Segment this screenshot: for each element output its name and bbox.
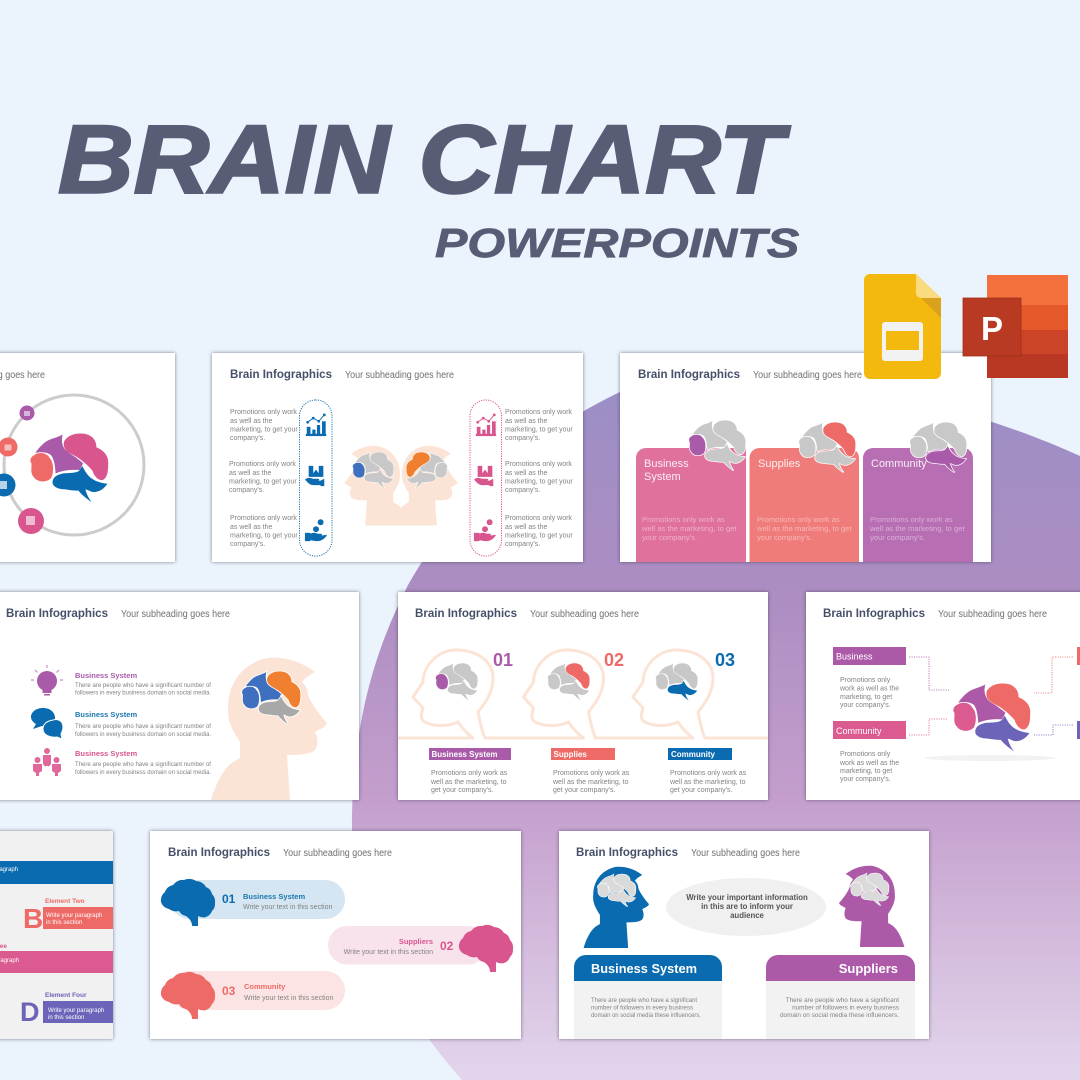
text block business: marketing, to get — [840, 694, 892, 701]
pill 02: 02 — [440, 939, 454, 953]
label: community: Community — [671, 750, 716, 759]
left capsule — [300, 400, 332, 556]
panel: slide head with list — [0, 592, 359, 800]
right text column: Promotions only work — [505, 515, 572, 522]
right labels — [1077, 647, 1080, 739]
text block business: your company's. — [840, 702, 891, 709]
panel: slide pills — [150, 831, 521, 1039]
left text column: Promotions only work — [230, 515, 297, 522]
element four — [20, 992, 113, 1027]
card: business system: well as the marketing, to get — [641, 524, 737, 533]
list item 3: There are people who have a significant number of — [75, 761, 211, 768]
icon: people — [33, 748, 61, 776]
subheading: Your subheading goes here — [345, 370, 454, 381]
number 02: 02 — [604, 650, 624, 670]
card: supplies: Supplies — [758, 458, 801, 470]
text block community — [839, 751, 899, 783]
card: community — [863, 448, 973, 562]
heading: Brain Infographics — [638, 369, 740, 381]
card: supplies: Promotions only work as — [757, 515, 840, 524]
text block business: work as well as the — [839, 686, 899, 692]
heading: Brain Infographics — [230, 369, 332, 381]
icon: light bulb — [31, 665, 63, 696]
panel: slide double heads — [212, 353, 583, 562]
panel: slide facing heads — [559, 831, 929, 1039]
card: community: your company's. — [870, 533, 925, 542]
band: element three — [0, 943, 113, 973]
left text column: marketing, to get your — [230, 532, 298, 540]
purple head brain — [851, 873, 889, 906]
title: BRAIN CHART — [58, 106, 791, 214]
element two — [23, 898, 113, 934]
right text column: company's. — [505, 435, 540, 442]
head outlines — [398, 650, 768, 738]
card: supplies: well as the marketing, to get — [756, 524, 852, 533]
left text column: company's. — [230, 435, 265, 442]
right text column: marketing, to get your — [505, 426, 573, 434]
band: element one — [0, 861, 113, 884]
label: community: Community — [836, 726, 882, 736]
double head silhouette — [344, 446, 458, 526]
right head brain — [406, 452, 447, 489]
text block business: Promotions only — [840, 677, 891, 684]
body text: Promotions only work as — [670, 770, 747, 777]
card: business system: your company's. — [642, 533, 697, 542]
left text column: company's. — [230, 541, 265, 548]
card: business system — [636, 448, 746, 562]
left text column: marketing, to get your — [230, 426, 298, 434]
label: business system — [429, 748, 511, 760]
pill 01: 01 — [222, 892, 236, 906]
panel: slide circular brain — [0, 353, 175, 562]
heading: Brain Infographics — [576, 847, 678, 859]
colored brain — [242, 671, 300, 724]
text block business — [839, 677, 899, 709]
right text column: marketing, to get your — [505, 478, 573, 486]
background blob — [352, 380, 1080, 1080]
text block community: your company's. — [840, 776, 891, 783]
pill 03: Community — [244, 982, 286, 991]
brain shadow — [925, 755, 1055, 761]
pill 02 — [328, 925, 513, 972]
blue head — [584, 867, 649, 948]
left text column: as well as the — [229, 470, 272, 477]
subheading: Your subheading goes here — [530, 609, 639, 620]
element two: Write your paragraph — [46, 913, 102, 919]
card: business system: Promotions only work as — [642, 515, 725, 524]
right text column: as well as the — [505, 470, 548, 477]
panel: business system: Business System — [591, 961, 697, 976]
element four: Element Four — [45, 992, 87, 999]
right text column: Promotions only work — [505, 409, 572, 416]
pill 02: Suppliers — [399, 937, 433, 946]
number 03: 03 — [715, 650, 735, 670]
left head brain — [353, 452, 394, 489]
list item 2: Business System — [75, 710, 137, 719]
subheading: Your subheading goes here — [691, 848, 800, 859]
label: supplies — [551, 748, 615, 760]
left text column: as well as the — [230, 418, 273, 425]
card: supplies — [750, 448, 859, 562]
right text column: as well as the — [505, 418, 548, 425]
label: business: Business — [836, 652, 873, 662]
panel: suppliers — [766, 955, 915, 1039]
text block community: Promotions only — [840, 751, 891, 758]
right text column: as well as the — [505, 524, 548, 531]
purple head — [839, 866, 904, 947]
element four: in this section — [48, 1015, 84, 1021]
left text column: Promotions only work — [230, 409, 297, 416]
pill 01: Business System — [243, 892, 305, 901]
list item 3 — [75, 749, 211, 776]
text block community: marketing, to get — [840, 768, 892, 775]
number 01: 01 — [493, 650, 513, 670]
panel: business system: number of followers in every business — [591, 1004, 693, 1012]
body text: get your company's. — [670, 787, 732, 794]
body text: well as the marketing, to — [669, 779, 746, 786]
subheading: Your subheading goes here — [753, 370, 862, 381]
panel: suppliers: There are people who have a significant — [786, 997, 899, 1004]
left text column: company's. — [229, 487, 264, 494]
callout ellipse: audience — [730, 911, 765, 920]
panel: slide lettered elements — [0, 831, 113, 1039]
left text column: marketing, to get your — [229, 478, 297, 486]
subheading: Your subheading goes here — [121, 609, 230, 620]
right text column: marketing, to get your — [505, 532, 573, 540]
list item 2: There are people who have a significant number of — [75, 723, 211, 730]
card brains — [689, 420, 966, 472]
list item 1: Business System — [75, 671, 137, 680]
panel: slide connected brain — [806, 592, 1080, 800]
panel: business system: There are people who have a significant — [591, 997, 697, 1004]
right text column: company's. — [505, 541, 540, 548]
panel: slide three numbered heads — [398, 592, 768, 800]
body text: well as the marketing, to — [552, 779, 629, 786]
subtitle: POWERPOINTS — [435, 221, 799, 266]
callout ellipse — [666, 878, 826, 936]
element two: B — [23, 903, 43, 934]
brain — [953, 684, 1030, 751]
right capsule — [470, 400, 502, 556]
ring — [4, 395, 144, 535]
head silhouette — [211, 658, 327, 800]
label: community — [833, 721, 906, 739]
element four: Write your paragraph — [48, 1008, 104, 1014]
body text: Promotions only work as — [431, 770, 508, 777]
label: community — [668, 748, 732, 760]
card: community: Promotions only work as — [870, 515, 953, 524]
body text — [430, 770, 747, 794]
icon: google slides — [864, 274, 941, 379]
element two: in this section — [46, 920, 82, 926]
list item 2: followers in every business domain on social media. — [75, 731, 211, 738]
list item 3: Business System — [75, 749, 137, 758]
body text: Promotions only work as — [553, 770, 630, 777]
connectors — [909, 657, 1073, 735]
element two: Element Two — [45, 898, 85, 905]
subheading: Your subheading goes here — [938, 609, 1047, 620]
left icons — [305, 413, 327, 541]
heading: Brain Infographics — [6, 608, 108, 620]
panel: slide three cards — [620, 353, 991, 562]
card: business system: System — [644, 471, 681, 483]
icon nodes — [0, 406, 44, 534]
brain — [30, 434, 108, 502]
right text column: company's. — [505, 487, 540, 494]
panel: suppliers: number of followers in every business — [792, 1004, 899, 1012]
card: business system: Business — [644, 458, 689, 470]
body text: get your company's. — [553, 787, 615, 794]
list item 1 — [75, 671, 211, 696]
pill 03 — [161, 971, 345, 1019]
list item 1: followers in every business domain on social media. — [75, 690, 211, 696]
right icons — [474, 413, 496, 541]
icon: powerpoint — [963, 275, 1068, 378]
icon: powerpoint: P — [981, 310, 1003, 347]
body text: well as the marketing, to — [430, 779, 507, 786]
label: business system: Business System — [432, 750, 498, 759]
list item 3: followers in every business domain on social media. — [75, 769, 211, 776]
list item 1: There are people who have a significant number of — [75, 682, 211, 689]
card: supplies: your company's. — [757, 533, 812, 542]
label: supplies: Supplies — [554, 750, 587, 759]
list item 2 — [75, 710, 211, 738]
panel: business system — [574, 955, 722, 1039]
left text column: Promotions only work — [229, 461, 296, 468]
pill 01 — [161, 879, 345, 926]
heading: Brain Infographics — [168, 847, 270, 859]
subheading: Your subheading goes here — [283, 848, 392, 859]
head brains — [436, 663, 698, 701]
element four: D — [20, 997, 40, 1027]
left text column: as well as the — [230, 524, 273, 531]
right text column: Promotions only work — [505, 461, 572, 468]
body text: get your company's. — [431, 787, 493, 794]
card: community: Community — [871, 458, 927, 470]
panel: suppliers: Suppliers — [839, 961, 898, 976]
pill 03: Write your text in this section — [244, 995, 333, 1002]
pill 02: Write your text in this section — [344, 949, 433, 956]
card: community: well as the marketing, to get — [869, 524, 965, 533]
panel: business system: domain on social media these influencers. — [591, 1012, 701, 1019]
label: business — [833, 647, 906, 665]
blue head brain — [598, 874, 636, 907]
panel: suppliers: domain on social media these influencers. — [780, 1012, 899, 1019]
heading: Brain Infographics — [415, 608, 517, 620]
left text column — [229, 409, 298, 548]
callout ellipse: in this are to inform your — [701, 902, 793, 911]
right text column — [505, 409, 573, 548]
pill 01: Write your text in this section — [243, 904, 332, 911]
icon: chat bubbles — [31, 708, 63, 739]
pill 03: 03 — [222, 984, 236, 998]
text block community: work as well as the — [839, 760, 899, 767]
callout ellipse: Write your important information — [686, 893, 808, 902]
heading: Brain Infographics — [823, 608, 925, 620]
